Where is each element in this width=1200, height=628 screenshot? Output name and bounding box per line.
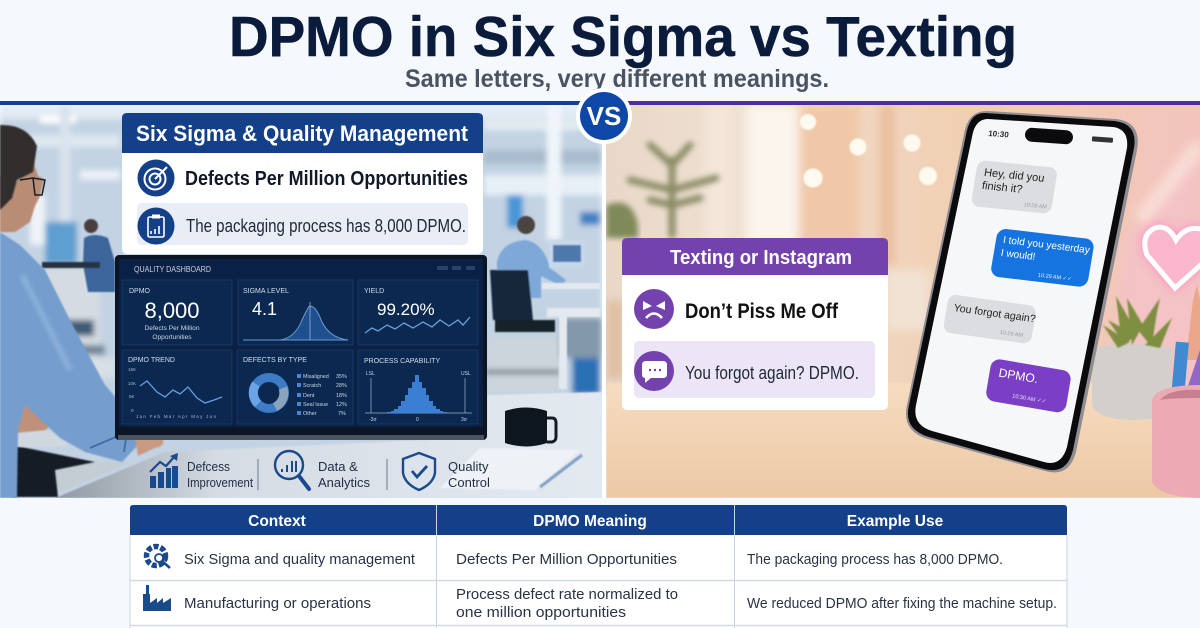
chat bubble: purple: [985, 358, 1072, 414]
chat bubble: gray: Hey, did you: [983, 167, 1045, 185]
table row: manufacturing: [143, 585, 1057, 621]
dashboard panel: DPMO trend: DPMO TREND: [128, 357, 175, 364]
blurred palm: [630, 145, 716, 235]
potted plant: [1092, 296, 1172, 420]
chat bubble: gray: 10:28 AM: [1023, 202, 1048, 211]
dashboard panel: DPMO trend: Jan Feb Mar Apr May Jun: [136, 414, 216, 419]
dashboard panel: yield: 99.20%: [377, 300, 435, 319]
dashboard panel: process capability: 0: [416, 417, 419, 423]
panel: six sigma photo: [0, 105, 602, 498]
dashboard panel: defects by type: Dent: [303, 393, 315, 399]
panel: texting card: [622, 238, 888, 410]
chat bubble: gray reply: You forgot again?: [953, 302, 1037, 325]
chat bubble: blue: [990, 228, 1095, 288]
table row: six sigma: The packaging process has 8,000 DPMO.: [747, 552, 1003, 568]
dashboard panel: process capability: LSL: [366, 371, 375, 377]
label: defects improvement: Defcess: [187, 459, 230, 474]
term: defects per million opportunities: Defects Per Million Opportunities: [185, 168, 468, 190]
icon row: [150, 451, 490, 490]
phone: [906, 111, 1138, 472]
section rule left: [0, 101, 600, 105]
dashboard panel: defects by type: Scratch: [303, 383, 321, 389]
VS badge: [576, 88, 632, 144]
chat bubble: blue: I told you yesterday: [1002, 235, 1092, 256]
panel: six sigma card: Six Sigma & Quality Management: [136, 121, 469, 146]
dashboard panel: yield: [358, 280, 478, 345]
label: defects improvement: [188, 462, 253, 490]
dashboard panel: defects by type: 28%: [336, 383, 347, 389]
dashboard panel: defects by type: Seal Issue: [303, 402, 328, 408]
dashboard panel: DPMO: [122, 280, 232, 345]
icon: clipboard: [138, 208, 174, 244]
notebook and pen: [440, 448, 582, 490]
string lights: [800, 114, 937, 188]
dashboard panel: process capability: 3σ: [461, 417, 468, 423]
coffee mug: [505, 408, 556, 446]
small blurred plant: [606, 202, 638, 238]
title: DPMO in Six Sigma vs Texting: [229, 5, 1017, 69]
comparison table: [130, 505, 1067, 628]
panel: six sigma card: [122, 113, 483, 254]
office background: [0, 105, 602, 498]
status bar: 10:30: [988, 129, 1010, 139]
dashboard panel: yield: YIELD: [364, 288, 384, 295]
dashboard panel: DPMO: DPMO: [129, 288, 151, 295]
background workers: [42, 216, 600, 389]
dashboard panel: process capability: PROCESS CAPABILITY: [364, 358, 440, 365]
example band: [634, 341, 875, 398]
table: [606, 383, 1200, 498]
dashboard panel: defects by type: [237, 350, 353, 424]
dashboard panel: process capability: [358, 350, 478, 424]
chat bubble: blue: 10:29 AM ✓✓: [1037, 273, 1072, 283]
desk surface: [55, 392, 602, 498]
monitor: [115, 255, 487, 440]
dashboard panel: DPMO trend: 10K: [128, 381, 136, 386]
icon: neon heart: [1145, 227, 1200, 288]
subtitle: Same letters, very different meanings.: [405, 65, 829, 93]
dashboard panel: process capability: USL: [461, 371, 471, 377]
example sentence: You forgot again? DPMO.: [685, 363, 859, 383]
table row: six sigma: Six Sigma and quality management: [184, 552, 415, 568]
label: data and analytics: Data &: [318, 459, 358, 474]
dashboard title: QUALITY DASHBOARD: [134, 265, 211, 274]
card header: [122, 113, 483, 153]
room background: [606, 105, 1200, 395]
chat bubble: gray reply: 10:29 AM: [999, 330, 1024, 339]
icon: quality control: [403, 453, 435, 490]
example sentence: The packaging process has 8,000 DPMO.: [186, 216, 466, 236]
icon: angry face: [634, 289, 674, 329]
icon: data and analytics: [275, 451, 309, 489]
dashboard panel: process capability: -3σ: [369, 417, 377, 423]
table row: manufacturing: Manufacturing or operations: [184, 596, 371, 612]
pencil cup: [1152, 285, 1200, 498]
table header: [130, 505, 1067, 535]
chat bubble: gray reply: [943, 294, 1038, 344]
panel: texting card: Texting or Instagram: [670, 247, 852, 269]
dashboard panel: defects by type: 7%: [338, 411, 346, 417]
chat bubble: purple: DPMO.: [998, 366, 1039, 386]
table row: six sigma: Defects Per Million Opportunities: [456, 552, 677, 568]
dashboard panel: sigma level: SIGMA LEVEL: [243, 288, 289, 295]
VS badge: VS: [587, 101, 621, 131]
icon: defects improvement: [150, 453, 178, 488]
icon: chat: [634, 351, 674, 391]
chat bubble: gray: [971, 160, 1058, 214]
table row: six sigma: [146, 546, 1003, 568]
chat bubble: blue: I would!: [1000, 248, 1036, 263]
card header: [622, 238, 888, 275]
worker at desk: [0, 125, 163, 498]
dashboard panel: DPMO trend: [122, 350, 232, 424]
dashboard panel: defects by type: 35%: [336, 374, 347, 380]
dashboard panel: DPMO trend: 0: [131, 408, 134, 413]
dashboard panel: sigma level: [238, 280, 353, 345]
term: don't piss me off: Don’t Piss Me Off: [685, 300, 839, 323]
chat bubble: purple: 10:30 AM ✓✓: [1012, 393, 1047, 405]
panel: texting photo: [606, 105, 1200, 498]
dashboard panel: defects by type: 18%: [336, 393, 347, 399]
table row: manufacturing: one million opportunities: [456, 605, 626, 621]
dashboard panel: DPMO: Defects Per Million: [145, 325, 200, 332]
dashboard panel: defects by type: DEFECTS BY TYPE: [243, 357, 307, 364]
icon: target: [138, 160, 174, 196]
dashboard panel: defects by type: 12%: [336, 402, 347, 408]
table header: Example Use: [847, 513, 944, 530]
pink wall corner: [1121, 177, 1194, 386]
table header: Context: [248, 513, 306, 530]
table row: manufacturing: Process defect rate normalized to: [456, 587, 678, 603]
dashboard panel: DPMO: Opportunities: [152, 334, 192, 341]
icon: factory: [143, 585, 171, 611]
dashboard panel: defects by type: Other: [303, 411, 317, 417]
table header: DPMO Meaning: [533, 513, 647, 530]
label: quality control: Quality: [448, 459, 489, 474]
icon: gear: [146, 546, 170, 568]
dashboard panel: DPMO: 8,000: [144, 298, 200, 323]
dashboard panel: DPMO trend: 15K: [128, 367, 136, 372]
label: data and analytics: Analytics: [318, 475, 371, 490]
section rule right: [606, 101, 1200, 105]
dashboard panel: DPMO trend: 5K: [129, 394, 135, 399]
dashboard panel: sigma level: 4.1: [252, 299, 277, 319]
chat bubble: gray: finish it?: [981, 180, 1023, 196]
label: defects improvement: Improvement: [187, 475, 253, 490]
example band: [137, 203, 468, 245]
label: quality control: Control: [448, 475, 490, 490]
dashboard panel: defects by type: Misaligned: [303, 374, 329, 380]
table row: manufacturing: We reduced DPMO after fixing the machine setup.: [747, 596, 1057, 612]
